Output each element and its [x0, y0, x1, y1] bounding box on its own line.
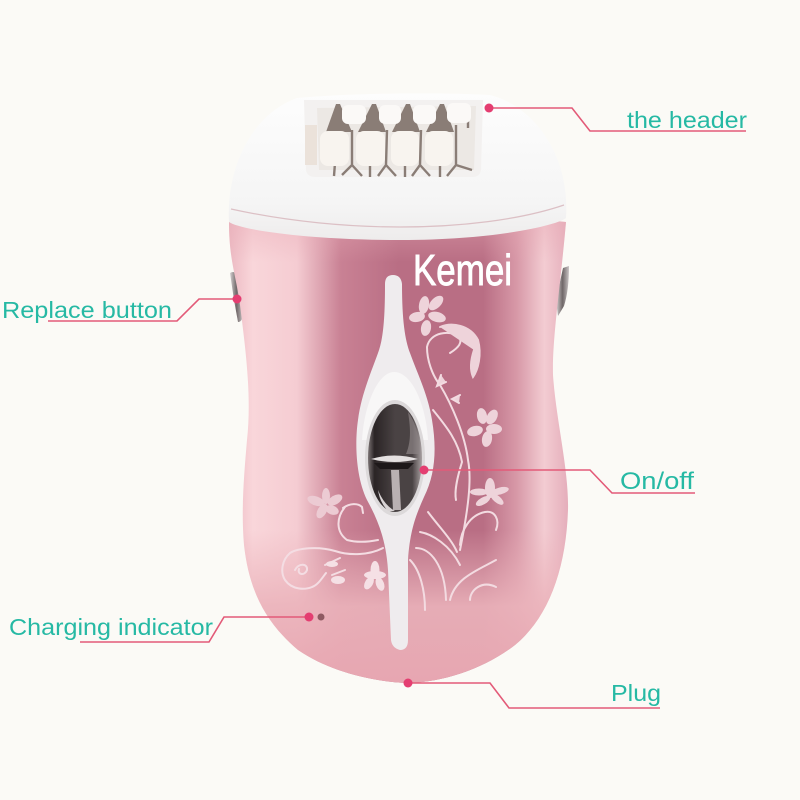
callout: charging indicator	[9, 612, 314, 642]
white cap header	[229, 93, 566, 240]
epilator device	[229, 93, 569, 683]
side replace button left	[230, 272, 243, 322]
callout: on/off: On/off	[620, 468, 694, 495]
body highlight overlay	[229, 205, 568, 683]
floral decoration left	[282, 488, 386, 592]
side replace button right	[556, 266, 569, 316]
callout: replace button: Replace button	[2, 297, 172, 323]
flower middle	[466, 407, 502, 448]
callout: plug: Plug	[611, 680, 661, 706]
flower lower	[470, 478, 510, 508]
callout: plug	[404, 678, 661, 708]
brand name: Kemei	[413, 246, 512, 295]
switch slider	[371, 456, 418, 462]
white centre strip	[356, 275, 435, 650]
flower top	[408, 293, 447, 337]
epilator head window	[304, 100, 483, 177]
callout: the header: the header	[627, 107, 747, 133]
upper rollers	[342, 105, 366, 124]
charging indicator light	[318, 614, 324, 620]
cap seam line	[231, 205, 564, 227]
pink body	[229, 205, 568, 683]
chrome on/off switch	[365, 400, 425, 516]
callout: on/off	[420, 466, 695, 495]
vine	[427, 333, 470, 550]
floral decoration right	[408, 293, 510, 610]
lower rollers	[320, 131, 349, 166]
callout: the header	[484, 104, 747, 133]
callout: replace button	[2, 294, 242, 323]
callout: charging indicator: Charging indicator	[9, 614, 213, 640]
metal tweezers	[326, 104, 454, 132]
